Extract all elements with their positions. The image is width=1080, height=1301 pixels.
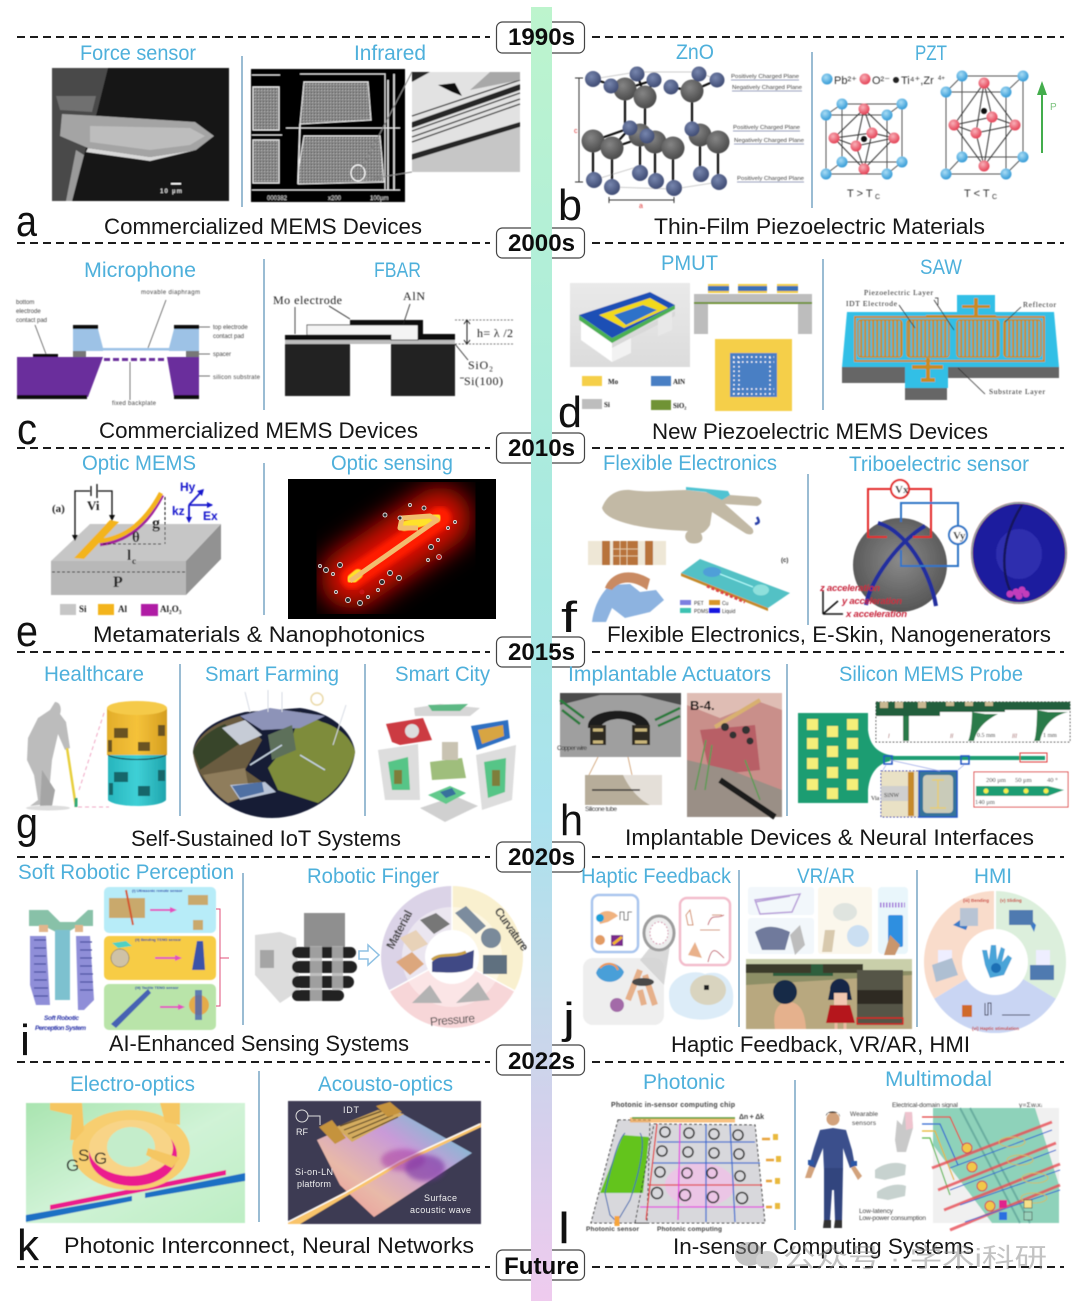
image: sensor cross-section view [972,503,1066,603]
heading: SAW: SAW [920,256,962,279]
image: surgical implant photo [687,693,782,817]
heading: Acousto-optics: Acousto-optics [318,1073,453,1096]
chart: HMI closed-loop wheel: (vi) Haptic stimulation [972,1026,1019,1031]
section title: Metamaterials & Nanophotonics [93,622,425,647]
section title: Self-Sustained IoT Systems [131,826,401,851]
illustration: robotic hand gripping block [255,913,357,1003]
diagram: SAW device: IDT Electrode [846,299,898,308]
illustration: acousto-optic device: Surface [424,1193,457,1203]
diagram: ZnO crystal structure: a [639,203,643,210]
diagram: FBAR cross-section: Mo electrode [273,293,342,307]
panel: tactile sensor stage [104,984,216,1030]
panel j: haptic feedback, VR/AR, HMI [561,865,1066,1057]
divider [263,463,265,615]
diagram: PZT cell below Tc: C [992,194,997,201]
diagram: silicon MEMS probe: SiNW [884,793,899,799]
legend: optic MEMS materials: Al [118,604,127,614]
illustration: soft robotic gripper: Perception System [35,1025,86,1032]
illustration: acousto-optic device: platform [297,1179,331,1189]
diagram: optic MEMS cantilever: θ [132,530,140,546]
illustration: avatar with wearable sensors: Wearable [850,1111,878,1118]
diagram: SAW device: Piezoelectric Layer [864,288,934,297]
diagram: SAW device: Substrate Layer [989,387,1046,396]
image: force sensor micrograph [52,68,229,201]
image: infrared array micrograph: x200 [328,196,342,202]
chart: HMI closed-loop wheel: (v) Sliding [1000,898,1022,903]
panel e: metamaterials and nanophotonics [16,452,496,656]
legend: optic MEMS materials [60,604,182,616]
charge plane labels: Negatively Charged Plane [734,138,804,144]
illustration: electro-optic ring modulator: G [66,1156,79,1175]
diagram: microphone cross-section: electrode [16,309,41,315]
diagram: SAW device: Reflector [1023,300,1056,309]
diagram: optic MEMS cantilever: Ex [203,509,218,523]
panel k: photonic interconnect, neural networks [17,1071,481,1270]
watermark: WeChat account [735,1242,1047,1273]
charge plane labels: Positively Charged Plane [731,74,799,80]
charge plane labels: Positively Charged Plane [737,176,804,182]
heading: Smart Farming: Smart Farming [205,663,339,686]
diagram: FBAR cross-section: AlN [403,289,425,303]
divider [807,474,809,625]
image: infrared zoom inset [412,72,520,172]
diagram: silicon MEMS probe: 140 μm [975,799,995,806]
legend: PMUT materials [582,376,686,410]
image: VR classroom scene [746,959,912,1029]
illustration: smart farm hemisphere [193,690,355,818]
divider [822,259,824,410]
divider [794,1080,796,1230]
diagram: optic MEMS cantilever: g [152,515,160,532]
arrow: polarization P [1037,81,1057,153]
diagram: optic MEMS cantilever: l [127,548,131,564]
charge plane labels: Positively Charged Plane [733,125,800,131]
divider [811,52,813,208]
diagram: ZnO crystal structure [574,66,730,210]
panel letter e: e [16,607,38,656]
bracket: sensor outputs to perception [216,909,229,1006]
section title: Flexible Electronics, E-Skin, Nanogenerators [607,622,1051,647]
diagram: silicon MEMS probe: I [888,734,890,740]
watermark: WeChat account: 公众号 · 学术i科研 [783,1243,1047,1273]
illustration: VR/AR sensing panels [748,887,908,955]
diagram: photonic in-sensor computing chip [586,1102,781,1233]
diagram: silicon MEMS probe: 200 μm [986,777,1006,784]
diagram: PMUT 3D device [570,283,690,367]
diagram: multimodal photonic network [892,1102,1060,1230]
heading: Force sensor: Force sensor [80,42,196,65]
illustration: electro-optic ring modulator: S [78,1146,89,1165]
year labels: Future [504,1253,579,1280]
diagram: triboelectric sphere sensor [819,480,967,620]
diagram: optic MEMS cantilever [51,480,221,595]
diagram: optic MEMS cantilever: (a) [52,503,65,515]
heading: VR/AR: VR/AR [797,865,855,888]
diagram: microphone cross-section: contact pad [16,318,47,324]
illustration: electro-optic ring modulator [26,1103,245,1223]
diagram: SAW device [842,288,1059,400]
diagram: microphone cross-section: fixed backplate [112,401,157,407]
panel: ultrasonic sensor stage: (i) Ultrasonic remote sensor [132,889,183,893]
illustration: soft robotic gripper: Soft Robotic [44,1015,79,1022]
legend: optic MEMS materials: Si [79,604,87,614]
year labels: 2015s [508,639,575,666]
legend: PZT ions: 4+ [938,76,945,82]
legend: PMUT materials: AlN [673,378,685,386]
divider [263,259,265,410]
section title: In-sensor Computing Systems [673,1234,974,1259]
image: SMA actuator photo [557,693,681,813]
heading: Implantable Actuators: Implantable Actuators [568,663,771,686]
year label boxes [496,22,584,1280]
panel i: AI-enhanced sensing systems [18,861,532,1065]
legend: PZT ions: O²⁻ [872,75,890,87]
diagram: multimodal photonic network: Electrical-domain signal [892,1102,959,1109]
panel letter j: j [561,994,575,1043]
year labels: 1990s [508,24,575,51]
divider [364,664,366,816]
diagram: microphone cross-section: top electrode [213,325,248,331]
diagram: silicon MEMS probe: 1 mm [1043,733,1057,739]
image: optic sensing plasmonic resonator [288,479,496,619]
section title: Photonic Interconnect, Neural Networks [64,1233,474,1258]
legend: optic MEMS materials: Al₂O₃ [160,604,182,614]
heading: Multimodal: Multimodal [885,1068,992,1091]
heading: Smart City: Smart City [395,663,490,686]
diagram: photonic in-sensor computing chip: Δn + Δk [739,1114,764,1121]
heading: Optic sensing: Optic sensing [331,452,453,475]
heading: Photonic: Photonic [643,1071,725,1094]
panel letter a: a [16,197,37,246]
diagram: PZT cell above Tc: C [875,194,880,201]
heading: Microphone: Microphone [84,259,196,282]
panel f: flexible electronics, e-skin, nanogenerators [561,452,1066,647]
image: gloved hand bending sensor [592,572,664,622]
heading: Haptic Feedback: Haptic Feedback [581,865,731,888]
arrow: hollow to sensing wheel [359,945,379,965]
image: infrared array micrograph: 000382 [267,196,288,202]
section title: AI-Enhanced Sensing Systems [109,1031,409,1056]
panel: bending sensor stage [104,936,216,980]
diagram: optic MEMS cantilever: Vi [87,498,100,513]
diagram: silicon MEMS probe: 0.5 mm [977,733,996,739]
legend: PZT ions: Ti⁴⁺,Zr [901,75,934,87]
heading: Flexible Electronics: Flexible Electronics [603,452,777,475]
diagram: microfluidic chip [680,558,790,615]
year labels: 2020s [508,844,575,871]
panel: ultrasonic sensor stage [104,887,216,933]
panel letter d: d [558,388,582,437]
image: SMA actuator photo: Copper wire [557,745,587,752]
diagram: silicon MEMS probe: II [950,734,954,740]
panel l: in-sensor computing systems [558,1068,1060,1259]
diagram: microfluidic chip: Liquid [722,609,736,615]
heading: FBAR: FBAR [374,259,421,282]
diagram: photonic in-sensor computing chip: Photonic computing [657,1226,722,1233]
chart: material, curvature, pressure wheel [381,886,532,1029]
diagram: triboelectric sphere sensor: x acceleration [845,609,907,620]
panel letter h: h [560,796,583,845]
divider [242,873,244,1025]
divider [916,870,918,1027]
diagram: PZT cell below Tc: T < T [964,188,990,200]
panel h: implantable devices and neural interfaces [557,663,1070,850]
illustration: stacked triboelectric cylinder [107,701,167,806]
heading: Electro-optics: Electro-optics [70,1073,195,1096]
image: SMA actuator photo: Silicone tube [585,806,617,813]
diagram: FBAR cross-section: h= λ /2 [477,326,513,340]
section title: New Piezoelectric MEMS Devices [652,419,988,444]
illustration: acousto-optic device: RF [296,1127,308,1137]
diagram: silicon MEMS probe: Via [871,796,880,802]
heading: Healthcare: Healthcare [44,663,144,686]
heading: PZT: PZT [915,42,947,65]
image: infrared array micrograph [251,69,412,202]
illustration: electro-optic ring modulator: G [94,1149,107,1168]
diagram: microphone cross-section [16,290,261,407]
diagram: silicon MEMS probe: III [1012,734,1017,740]
diagram: microphone cross-section: movable diaphragm [141,290,200,296]
panel letter g: g [16,799,38,848]
diagram: microfluidic chip: (c) [781,558,788,564]
diagram: ZnO crystal structure: c [574,128,578,135]
panel letter l: l [558,1204,570,1253]
illustration: haptic ring and wearable system [583,895,733,1025]
divider [786,664,788,816]
illustration: smart city modules exploded cube [378,704,516,822]
arrow: polarization P: P [1050,102,1057,113]
diagram: PZT cell above Tc: T > T [847,188,873,200]
illustration: acousto-optic device: Si-on-LN [295,1167,333,1177]
heading: Silicon MEMS Probe: Silicon MEMS Probe [839,663,1023,686]
diagram: optic MEMS cantilever: c [132,556,136,566]
divider [179,664,181,816]
diagram: microfluidic chip: Cu [722,601,729,607]
panel g: self-sustained IoT systems [16,663,516,851]
chart: material, curvature, pressure wheel: Pressure [429,1011,476,1029]
divider [738,870,740,1027]
diagram: silicon MEMS probe [798,702,1070,817]
diagram: PZT cell above Tc [820,98,908,201]
section title: Implantable Devices & Neural Interfaces [625,825,1034,850]
image: surgical implant photo: B-4. [690,698,715,713]
illustration: avatar with wearable sensors: Low-power consumption [859,1215,926,1222]
heading: ZnO: ZnO [676,41,714,64]
diagram: PMUT top view [715,339,792,411]
divider [258,1071,260,1222]
diagram: optic MEMS cantilever: Hy [180,480,196,494]
diagram: microphone cross-section: spacer [213,352,231,358]
diagram: PZT cell below Tc [940,70,1028,201]
section title: Commercialized MEMS Devices [99,418,418,443]
divider [241,56,243,207]
legend: PMUT materials: Mo [608,378,619,386]
diagram: silicon MEMS probe: 40 ° [1047,777,1058,784]
diagram: FBAR cross-section [273,289,513,396]
image: copper sensor sample [588,541,666,565]
diagram: multimodal photonic network: y=Σwᵢxᵢ [1019,1102,1042,1109]
legend: PMUT materials: Si [604,401,610,409]
chart: material, curvature, pressure wheel: Curvature [492,905,532,954]
illustration: avatar with wearable sensors: Low-latency [859,1208,894,1215]
panel letter c: c [17,405,37,454]
diagram: triboelectric sphere sensor: Vy [953,530,966,542]
illustration: avatar with wearable sensors [805,1111,926,1228]
illustration: acousto-optic device: acoustic wave [410,1205,471,1215]
year labels: 2022s [508,1048,575,1075]
diagram: triboelectric sphere sensor: Vx [895,484,909,496]
diagram: silicon MEMS probe: 50 μm [1015,777,1032,784]
diagram: triboelectric sphere sensor: z acceleration [819,583,880,594]
chart: HMI closed-loop wheel: (iii) Bending [963,898,989,903]
panel: bending sensor stage: (ii) Bending TENG sensor [135,938,182,942]
image: force sensor micrograph: 10 µm [160,189,182,195]
heading: Robotic Finger: Robotic Finger [307,865,439,888]
panel a: commercialized MEMS devices, 1990s [16,42,520,246]
year labels: 2000s [508,230,575,257]
legend: PZT ions: Pb²⁺ [834,75,857,87]
illustration: avatar with wearable sensors: sensors [852,1120,877,1127]
chart: material, curvature, pressure wheel: Material [383,908,415,951]
panel letter i: i [20,1016,30,1065]
diagram: microfluidic chip: PET [694,601,704,607]
illustration: elderly person with smart cane [26,702,109,810]
year labels: 2010s [508,435,575,462]
legend: PZT ions [822,74,945,87]
heading: HMI: HMI [974,865,1012,888]
heading: PMUT: PMUT [661,252,718,275]
diagram: PMUT cross-section [694,284,812,334]
illustration: acousto-optic device: IDT [343,1105,360,1115]
diagram: microphone cross-section: contact pad [213,334,244,340]
panel b: thin-film piezoelectric materials [558,41,1057,239]
panel c: commercialized MEMS devices, 2000s [16,259,513,454]
diagram: photonic in-sensor computing chip: Photonic in-sensor computing chip [611,1102,735,1109]
year labels [504,24,579,1280]
panel d: new piezoelectric MEMS devices [558,252,1059,444]
legend: PMUT materials: SiO₂ [673,402,686,410]
panel: tactile sensor stage: (iii) Tactile TENG sensor [135,986,179,990]
diagram: photonic in-sensor computing chip: Photonic sensor [586,1226,639,1233]
charge plane labels: Negatively Charged Plane [732,85,802,91]
heading: Triboelectric sensor: Triboelectric sensor [849,453,1029,476]
section title: Thin-Film Piezoelectric Materials [654,214,985,239]
diagram: microphone cross-section: silicon substrate [213,375,261,381]
diagram: triboelectric sphere sensor: y acceleration [841,596,902,607]
illustration: soft robotic gripper [29,910,94,1032]
diagram: FBAR cross-section: Si(100) [464,374,503,388]
illustration: pointing hand with sensor [602,487,762,543]
diagram: optic MEMS cantilever: kz [172,504,185,518]
panel letter k: k [17,1221,40,1270]
diagram: optic MEMS cantilever: P [113,574,123,591]
section title: Commercialized MEMS Devices [104,214,422,239]
chart: HMI closed-loop wheel [924,891,1066,1033]
timeline gradient bar [531,7,552,1301]
charge plane labels [731,74,804,182]
heading: Infrared: Infrared [354,42,426,65]
section title: Haptic Feedback, VR/AR, HMI [671,1032,970,1057]
heading: Optic MEMS: Optic MEMS [82,452,196,475]
panel letter f: f [561,593,578,642]
image: infrared array micrograph: 100µm [370,196,388,202]
heading: Soft Robotic Perception: Soft Robotic Perception [18,861,234,884]
panel letter b: b [558,181,582,230]
diagram: FBAR cross-section: SiO₂ [468,358,493,372]
diagram: microfluidic chip: PDMS [694,609,709,615]
diagram: microphone cross-section: bottom [16,300,34,306]
illustration: acousto-optic device [288,1101,481,1224]
